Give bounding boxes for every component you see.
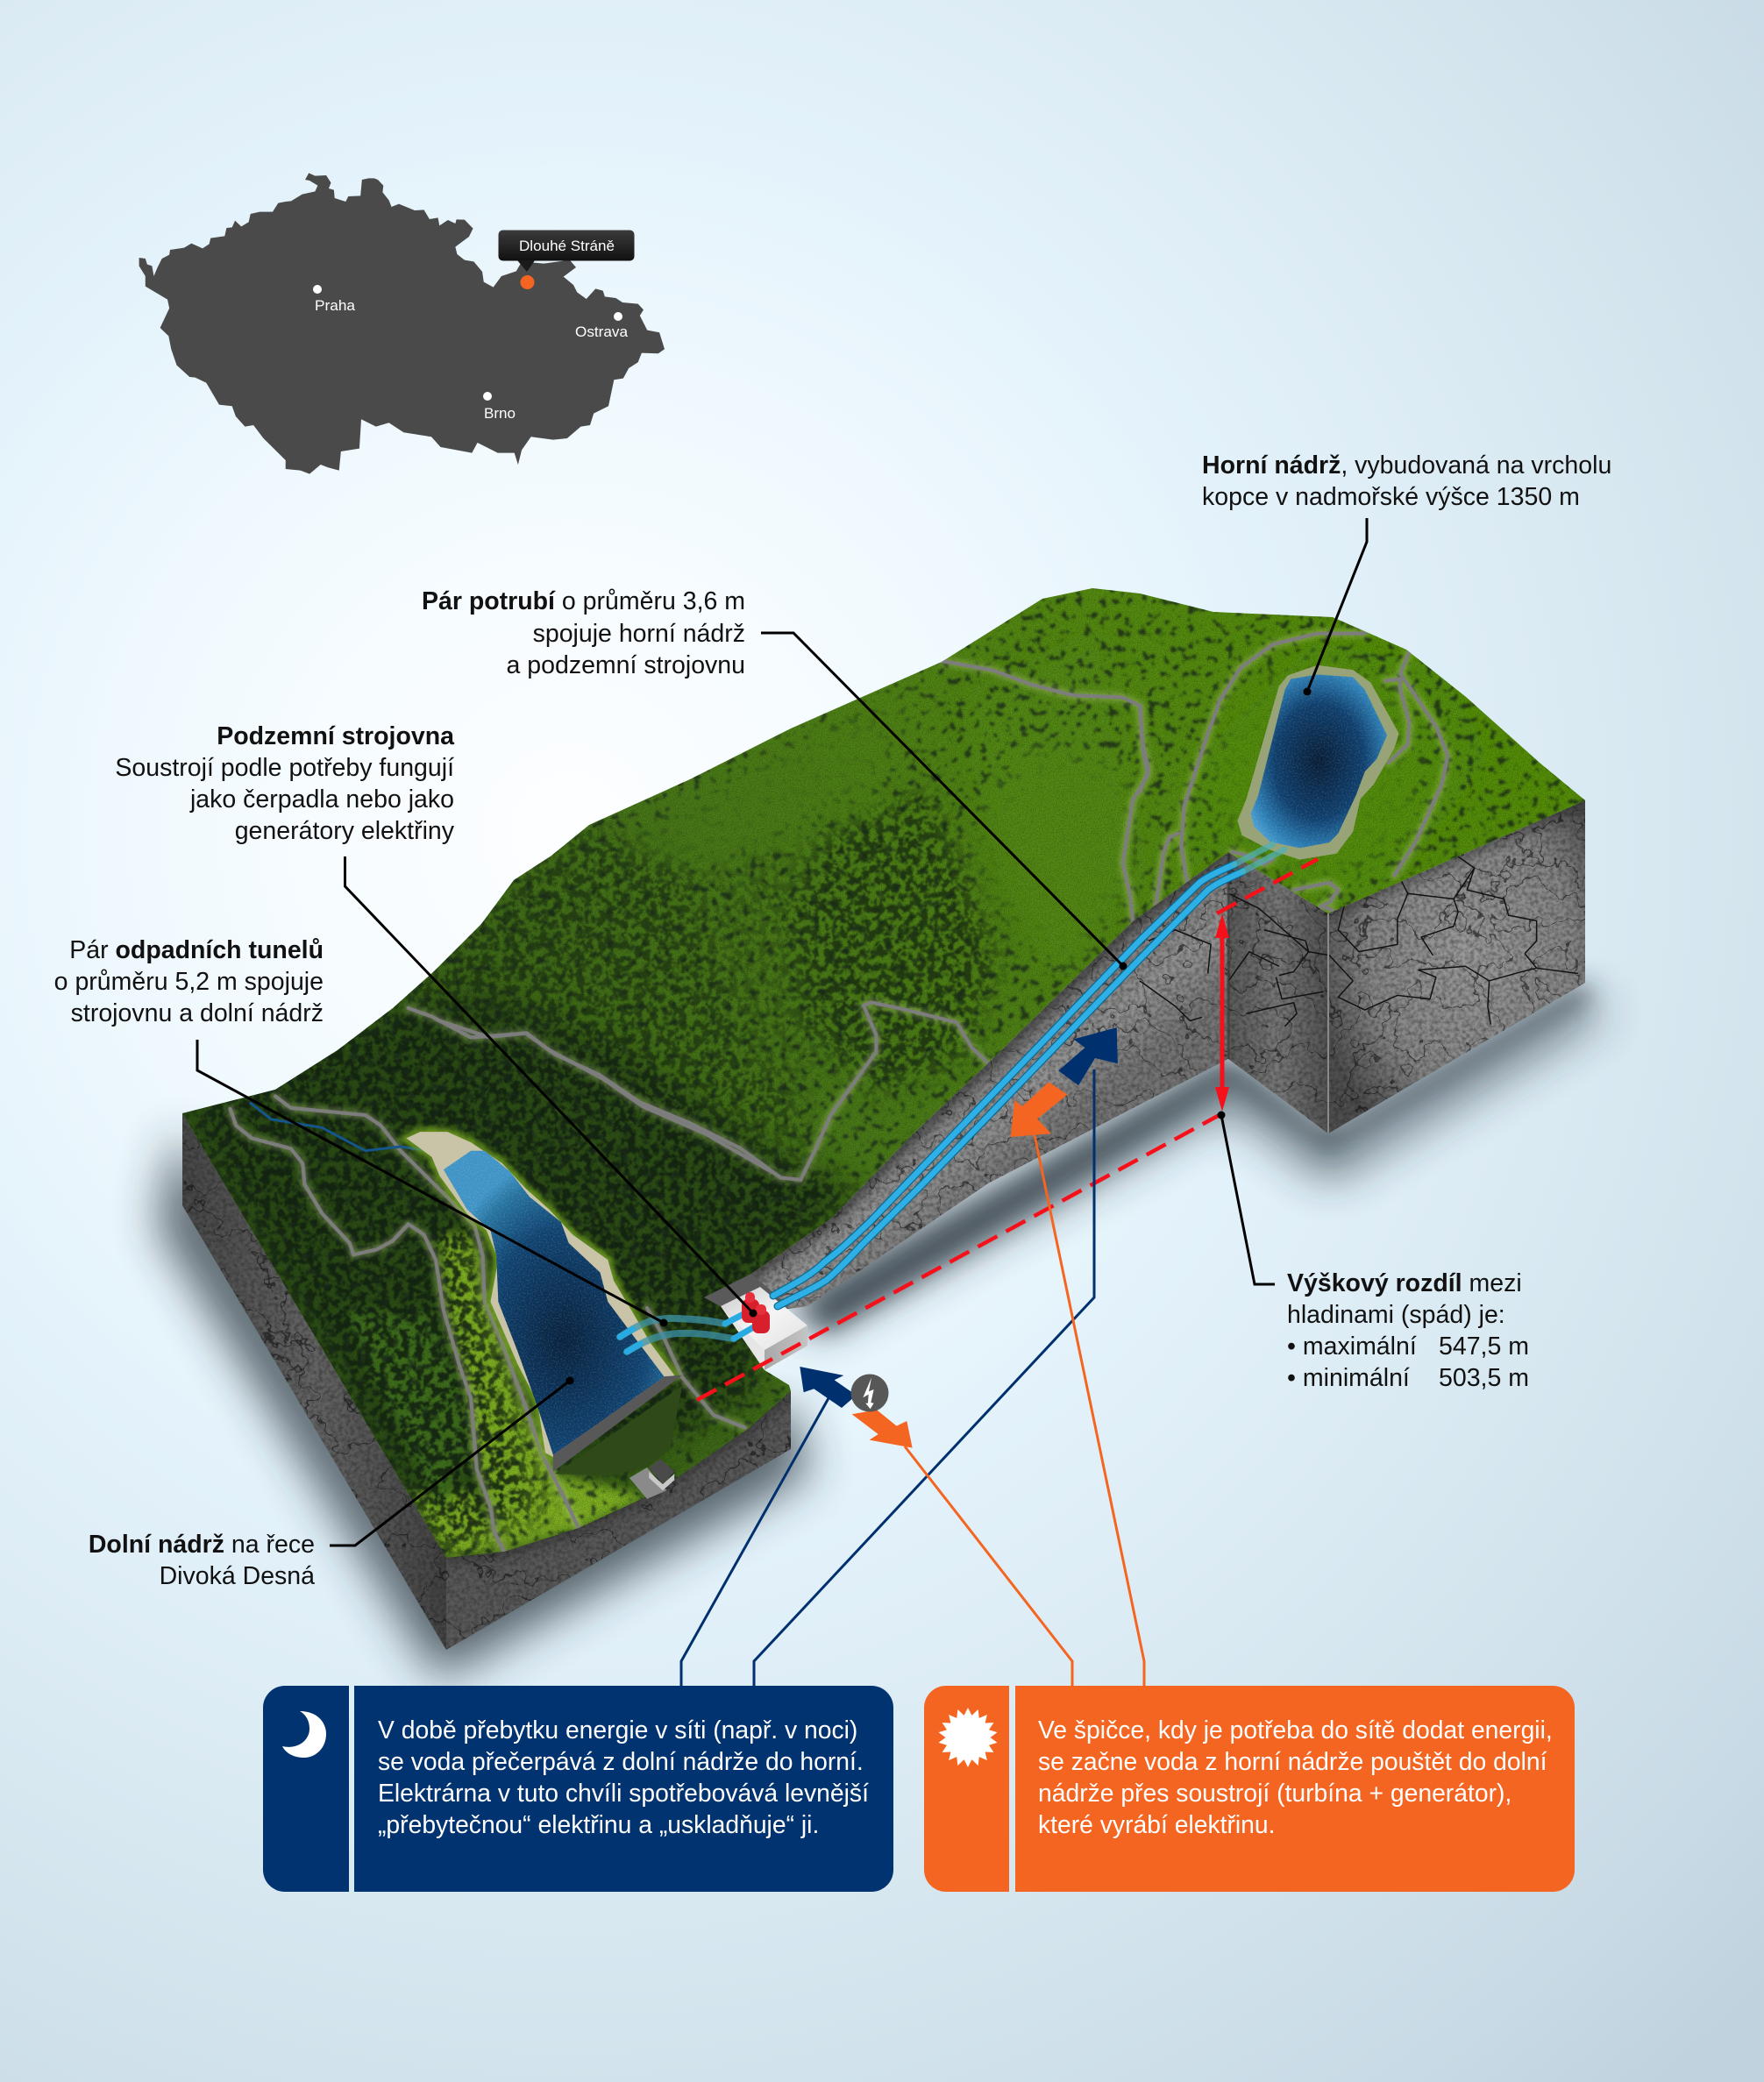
label: Horní nádrž: Horní nádrž, vybudovaná na vrcholu <box>1202 451 1611 480</box>
city: Brno <box>483 392 516 422</box>
red dashed levels <box>697 859 1318 1400</box>
night text: „přebytečnou“ elektřinu a „uskladňuje“ ji. <box>378 1810 819 1838</box>
front rock wall <box>446 1391 791 1650</box>
sandy shore <box>406 1132 674 1457</box>
label: Podzemní strojovna: jako čerpadla nebo jako <box>189 785 454 814</box>
night text: V době přebytku energie v síti (např. v noci) <box>378 1716 857 1744</box>
label: odpadní tunely: o průměru 5,2 m spojuje <box>54 968 324 996</box>
power station building <box>629 1459 674 1499</box>
city: Ostrava: Ostrava <box>575 323 629 340</box>
label: Pár potrubí: spojuje horní nádrž <box>533 620 745 648</box>
peak text: nádrže přes soustrojí (turbína + generátor), <box>1038 1779 1511 1807</box>
icon: moon <box>282 1711 326 1758</box>
underground powerhouse <box>704 1274 807 1370</box>
label: Výškový rozdíl: hladinami (spád) je: <box>1287 1301 1505 1329</box>
dark forest low slope <box>182 991 859 1560</box>
map of the Czech Republic <box>139 173 665 474</box>
mid green forest clearing <box>345 1311 471 1511</box>
icon: sun <box>937 1708 999 1767</box>
terrain surface with forest <box>175 579 1596 1569</box>
navy arrow on slope <box>1058 1027 1118 1085</box>
slope rock cut <box>693 852 1228 1319</box>
rock walls of the terrain block <box>175 789 1596 1666</box>
upper reservoir (Horní nádrž) <box>1237 665 1399 860</box>
city: Praha: Praha <box>315 297 356 314</box>
label: Pár potrubí: a podzemní strojovnu <box>507 651 745 679</box>
label: Podzemní strojovna: Soustrojí podle potřeby fungují <box>115 754 454 782</box>
label: Výškový rozdíl: 547,5 m <box>1439 1332 1529 1361</box>
left rock wall <box>182 1113 446 1650</box>
inner rock wall <box>1228 852 1328 1133</box>
panel: peak generation <box>924 1686 1575 1892</box>
water <box>1251 674 1387 848</box>
label: Výškový rozdíl: 503,5 m <box>1439 1364 1529 1392</box>
river Divoká Desná <box>250 1103 452 1168</box>
red double arrow: height difference <box>1215 913 1229 1112</box>
night text: Elektrárna v tuto chvíli spotřebovává levnější <box>378 1779 869 1807</box>
night text: se voda přečerpává z dolní nádrže do horní. <box>378 1747 864 1775</box>
peak text: se začne voda z horní nádrže pouštět do dolní <box>1038 1747 1547 1775</box>
dam crest <box>553 1375 682 1472</box>
label: Výškový rozdíl: Výškový rozdíl mezi <box>1287 1269 1522 1297</box>
connector lines: orange <box>905 1135 1144 1688</box>
peak text: Ve špičce, kdy je potřeba do sítě dodat energii, <box>1038 1716 1553 1744</box>
label: Horní nádrž: kopce v nadmořské výšce 1350 m <box>1202 483 1580 511</box>
block drop shadows <box>158 982 1604 1679</box>
mid green meadow <box>964 631 1140 982</box>
embankment <box>1237 665 1399 860</box>
label: Dolní nádrž: Divoká Desná <box>160 1562 315 1590</box>
label: Výškový rozdíl: • maximální <box>1287 1332 1417 1361</box>
connector lines: navy <box>681 1069 1094 1688</box>
city: Ostrava <box>575 312 629 340</box>
turbine units <box>742 1292 770 1333</box>
penstock pipes <box>773 844 1284 1306</box>
bright meadow around upper reservoir <box>1191 642 1471 913</box>
label: Výškový rozdíl: • minimální <box>1287 1364 1410 1392</box>
tailrace tunnels <box>620 1313 757 1352</box>
label: odpadní tunely: strojovnu a dolní nádrž <box>71 999 324 1027</box>
icon: electricity <box>850 1375 889 1411</box>
location marker: Dlouhé Stráně: Dlouhé Stráně <box>519 238 615 254</box>
label: Dolní nádrž: Dolní nádrž na řece <box>89 1531 315 1559</box>
city: Praha <box>313 285 356 314</box>
right rock wall <box>1328 800 1585 1133</box>
lime meadow strip <box>409 1234 647 1558</box>
orange arrow on slope <box>1011 1082 1068 1137</box>
road network <box>231 634 1447 1552</box>
navy arrow: pumped flow to grid <box>800 1367 857 1408</box>
label: Podzemní strojovna: Podzemní strojovna <box>217 722 455 750</box>
label: odpadní tunely: Pár odpadních tunelů <box>69 936 324 964</box>
label: Podzemní strojovna: generátory elektřiny <box>235 817 455 845</box>
peak text: které vyrábí elektřinu. <box>1038 1810 1276 1838</box>
lower reservoir (Dolní nádrž) <box>406 1132 682 1499</box>
label: Pár potrubí: Pár potrubí o průměru 3,6 m <box>422 587 745 615</box>
location marker: Dlouhé Stráně <box>498 230 635 289</box>
city: Brno: Brno <box>484 405 516 422</box>
panel: night pumping <box>263 1686 893 1892</box>
orange arrow: generated flow <box>852 1410 913 1448</box>
dam face <box>555 1386 682 1476</box>
leader lines and dots <box>197 518 1367 1546</box>
water <box>444 1151 665 1455</box>
